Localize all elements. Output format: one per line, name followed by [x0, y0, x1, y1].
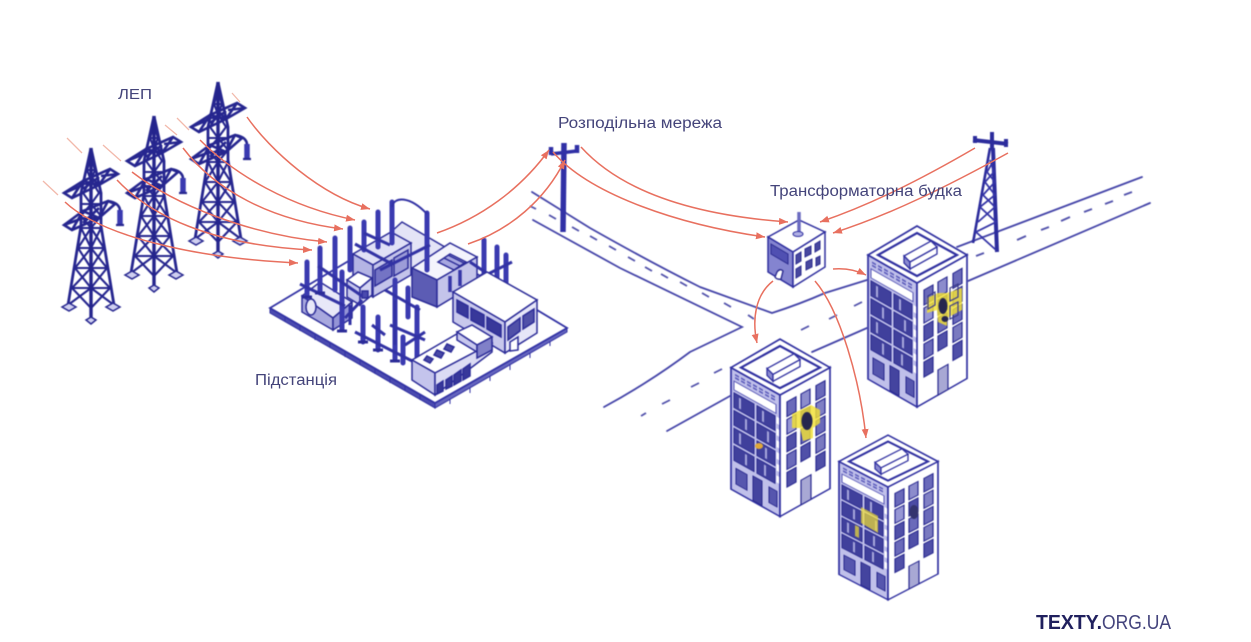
apartment building bottom: [839, 435, 938, 600]
transformer booth: [768, 212, 825, 287]
tower front: [62, 148, 124, 324]
label: Розподільна мережа: Розподільна мережа: [558, 115, 722, 132]
label: Трансформаторна будка: Трансформаторна будка: [770, 183, 962, 200]
label: Підстанція: Підстанція: [255, 372, 337, 389]
power transmission towers (ЛЕП): [62, 82, 251, 324]
insulator columns: [300, 199, 512, 365]
main building: [453, 272, 537, 353]
lit window glow: [855, 505, 918, 538]
power flow arrows: [43, 93, 1008, 438]
substation: [270, 199, 567, 408]
front low building with equipment: [412, 325, 492, 395]
platform: [270, 229, 567, 408]
small control block: [347, 272, 372, 305]
lit window glow: [755, 405, 820, 449]
logo: TEXTY.ORG.UA: [1036, 611, 1171, 634]
logo: TEXTY.ORG.UA: ORG.UA: [1102, 611, 1171, 634]
apartment building lower left: [731, 339, 830, 517]
distribution pole: [551, 143, 577, 232]
lit window glow: [927, 284, 962, 326]
logo: TEXTY.ORG.UA: TEXTY.: [1036, 611, 1102, 634]
road: distribution street and cross street: [530, 177, 1150, 431]
rear right block with roof equipment: [412, 243, 477, 307]
transmission tower on the right: [973, 132, 1008, 252]
tower rear: [189, 82, 251, 258]
left low block: [302, 282, 352, 330]
back machinery block: [353, 222, 450, 297]
apartment building right: [868, 226, 967, 407]
tower middle: [125, 116, 187, 292]
label: ЛЕП: ЛЕП: [118, 86, 152, 103]
